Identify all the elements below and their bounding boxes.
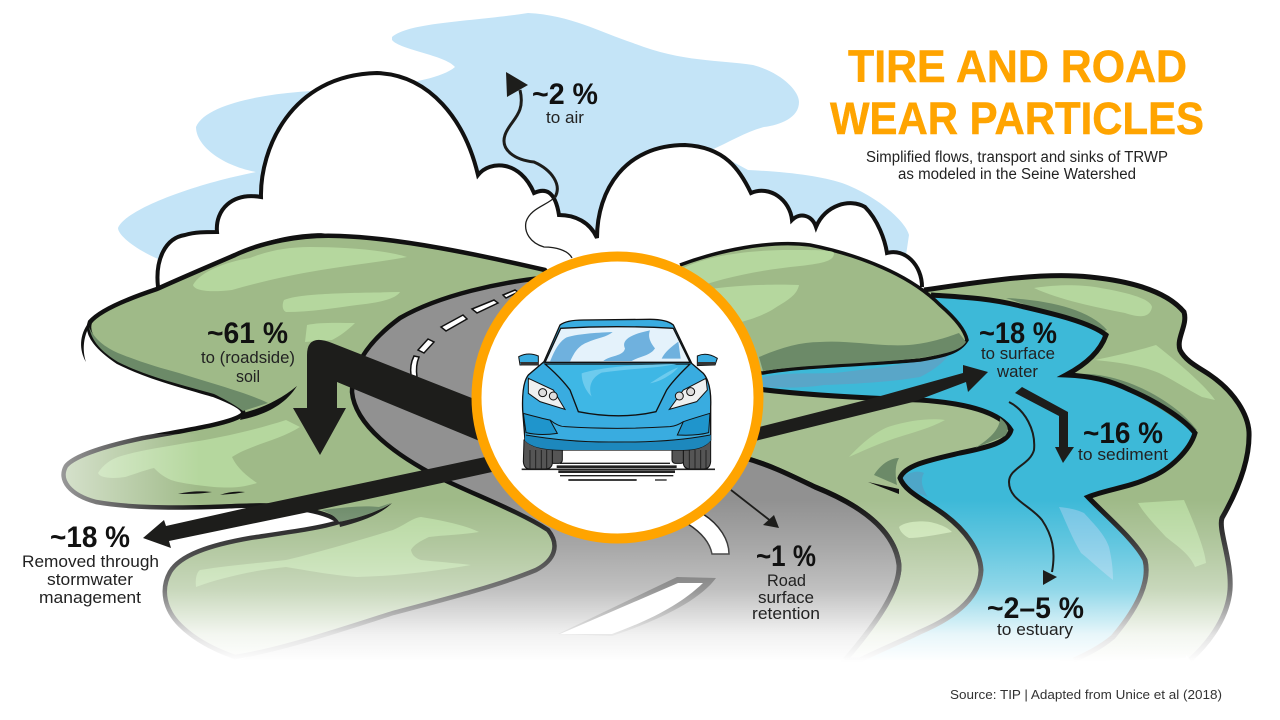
car body lines: [526, 420, 710, 442]
subtitle: Simplified flows, transport and sinks of TRWP: [866, 149, 1168, 166]
fog lamp panels: [523, 413, 710, 435]
label: to air: ~2 %: [532, 78, 598, 111]
road: [240, 277, 899, 660]
subtitle: as modeled in the Seine Watershed: [898, 166, 1136, 183]
wheels: [523, 440, 711, 469]
label: road surface retention: ~1 %: [756, 540, 816, 573]
arrow: to air: [504, 72, 572, 258]
windshield: [545, 327, 690, 362]
headlights: [528, 378, 707, 409]
label: to sediment: ~16 %: [1083, 417, 1163, 450]
title: [830, 41, 1204, 144]
label: to roadside soil: to (roadside): [201, 349, 295, 367]
arrow: to surface water: [745, 365, 988, 444]
label: to sediment: to sediment: [1078, 446, 1168, 464]
arrow: to sediment: [1015, 387, 1074, 463]
label: to sediment: [1078, 417, 1168, 464]
arrow: to estuary: [1009, 402, 1057, 585]
label: to surface water: [979, 317, 1057, 381]
river: [740, 295, 1197, 660]
left side fade: [55, 434, 200, 514]
left green hills: [64, 233, 554, 657]
far river bank: [924, 276, 1249, 662]
arrow: road surface retention: [731, 490, 779, 528]
label: to roadside soil: ~61 %: [207, 317, 288, 350]
sky background: [118, 13, 909, 262]
hood: [545, 364, 690, 416]
label: to surface water: water: [996, 363, 1039, 381]
label: to air: [532, 78, 598, 127]
label: to estuary: ~2–5 %: [987, 592, 1084, 625]
bottom fade: [0, 500, 1280, 665]
label: to surface water: to surface: [981, 345, 1055, 363]
car body: [523, 319, 711, 450]
label: to roadside soil: soil: [236, 368, 260, 386]
middle river strip: [745, 388, 1011, 660]
arrow: to roadside soil: [293, 340, 482, 455]
label: to surface water: ~18 %: [979, 317, 1057, 350]
car illustration: [519, 319, 717, 480]
source: Source: TIP | Adapted from Unice et al (2018): [950, 687, 1222, 702]
right hill: [680, 244, 967, 373]
hill ink strokes: [81, 233, 392, 527]
label: road surface retention: Road: [767, 572, 806, 590]
hill shadows: [89, 327, 391, 522]
subtitle: [866, 149, 1168, 183]
label: stormwater: ~18 %: [50, 521, 130, 554]
title: WEAR PARTICLES: [830, 93, 1204, 144]
landscape: [64, 233, 1249, 662]
label: to air: to air: [546, 109, 585, 127]
label: stormwater: Removed through: [22, 553, 159, 571]
hill highlights: [98, 247, 479, 587]
label: stormwater: management: [39, 589, 141, 607]
label: to estuary: [987, 592, 1084, 639]
car circle: [476, 256, 758, 538]
title: TIRE AND ROAD: [848, 41, 1187, 92]
label: stormwater: stormwater: [47, 571, 134, 589]
hood highlights: [582, 364, 678, 397]
label: road surface retention: surface: [758, 589, 814, 607]
clouds: [157, 73, 922, 287]
bumper shading: [525, 435, 711, 450]
mirrors: [519, 354, 717, 366]
label: to estuary: to estuary: [997, 621, 1074, 639]
label: to roadside soil: [201, 317, 295, 386]
label: road surface retention: retention: [752, 605, 820, 623]
car shadow: [522, 463, 715, 480]
arrow: stormwater management: [143, 456, 492, 548]
label: road surface retention: [752, 540, 820, 623]
label: stormwater: [22, 521, 159, 607]
road lane markings: [411, 290, 729, 636]
